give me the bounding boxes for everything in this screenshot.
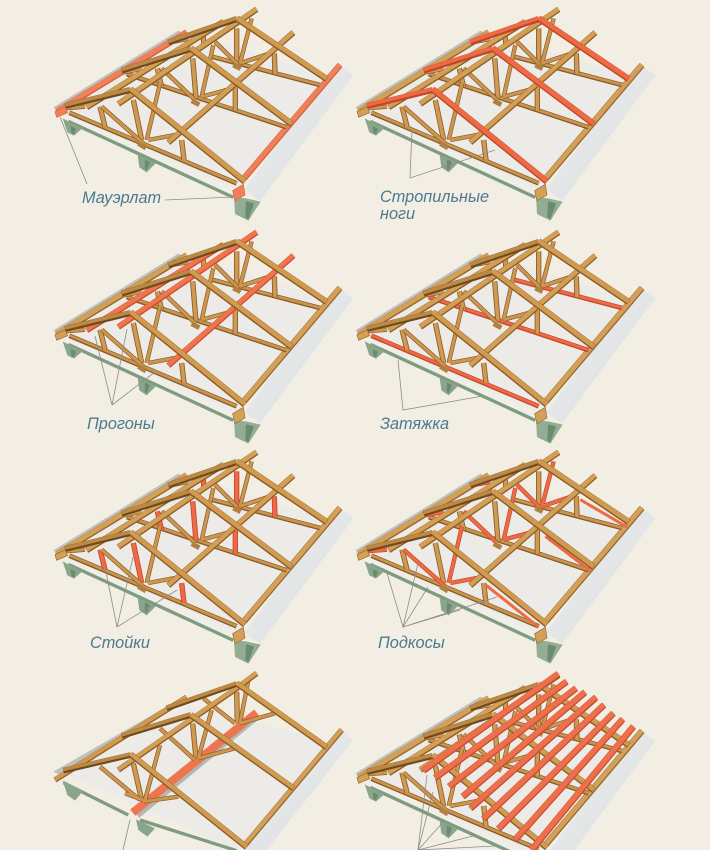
panel: Стойки <box>53 452 353 664</box>
label: Стропильные ноги: ноги <box>380 205 415 223</box>
leader lines <box>105 557 177 627</box>
panel: Подкосы <box>355 452 655 664</box>
label: Мауэрлат: Мауэрлат <box>82 189 161 207</box>
roof frame with common rafters highlighted <box>355 673 655 850</box>
label: Стойки: Стойки <box>90 634 150 652</box>
panel: обрешётка <box>355 673 655 850</box>
roof frame with purlins highlighted <box>53 232 353 444</box>
leader lines <box>95 329 155 405</box>
leader lines <box>60 117 233 200</box>
roof frame with struts highlighted <box>355 452 655 664</box>
leader lines <box>418 775 495 850</box>
roof frame with ties highlighted <box>355 232 655 444</box>
red rafters <box>423 673 633 850</box>
panel: Стропильные ноги <box>355 9 655 223</box>
label: Стропильные ноги: Стропильные <box>380 188 489 206</box>
roof frame with rafters highlighted <box>355 9 655 221</box>
roof frame with ridge-bearing beam highlighted <box>53 673 353 850</box>
panel: лежень <box>53 673 353 850</box>
label: Подкосы: Подкосы <box>378 634 445 652</box>
panel: Прогоны <box>53 232 353 444</box>
panel: Мауэрлат <box>53 9 353 221</box>
leader lines <box>398 360 483 410</box>
panel: Затяжка <box>355 232 655 444</box>
leader lines <box>387 563 497 627</box>
roof frame with posts highlighted <box>53 452 353 664</box>
leader line <box>123 820 130 850</box>
label: Затяжка: Затяжка <box>380 415 449 433</box>
leader lines <box>410 130 495 178</box>
roof frame with mauerlat highlighted <box>53 9 353 221</box>
label: Прогоны: Прогоны <box>87 415 155 433</box>
